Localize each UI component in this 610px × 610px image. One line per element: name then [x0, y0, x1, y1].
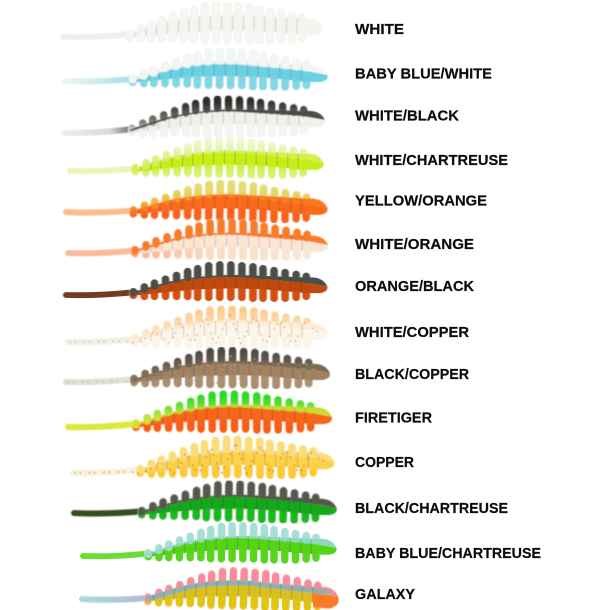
lure: black/copper [66, 350, 330, 386]
label: black/copper: BLACK/COPPER [355, 366, 469, 383]
label: white: WHITE [355, 21, 404, 38]
label: copper: COPPER [355, 454, 414, 471]
lure: white/orange [68, 222, 328, 257]
lure: white [63, 6, 323, 40]
label: firetiger: FIRETIGER [355, 410, 432, 426]
label: white/black: WHITE/BLACK [355, 108, 459, 124]
lure: white/chartreuse [70, 140, 324, 175]
lure: orange/black [66, 265, 327, 298]
label: galaxy: GALAXY [355, 586, 415, 603]
label: yellow/orange: YELLOW/ORANGE [355, 192, 487, 210]
lure: galaxy [82, 567, 339, 609]
label: white/orange: WHITE/ORANGE [355, 236, 474, 253]
lure: baby blue/chartreuse [83, 525, 337, 560]
label: black/chartreuse: BLACK/CHARTREUSE [355, 500, 508, 517]
lure: black/chartreuse [74, 482, 337, 521]
label: orange/black: ORANGE/BLACK [355, 278, 474, 295]
lure: yellow/orange [66, 181, 328, 221]
lure: white/black [65, 97, 325, 136]
label: white/chartreuse: WHITE/CHARTREUSE [355, 152, 508, 169]
label: baby blue/white: BABY BLUE/WHITE [355, 66, 492, 82]
lure: baby blue/white [65, 50, 328, 88]
lure: white/copper [68, 309, 328, 346]
label: baby blue/chartreuse: BABY BLUE/CHARTREUSE [355, 545, 541, 562]
lure: copper [73, 439, 334, 477]
label: white/copper: WHITE/COPPER [355, 324, 469, 341]
lure: firetiger [68, 394, 332, 431]
